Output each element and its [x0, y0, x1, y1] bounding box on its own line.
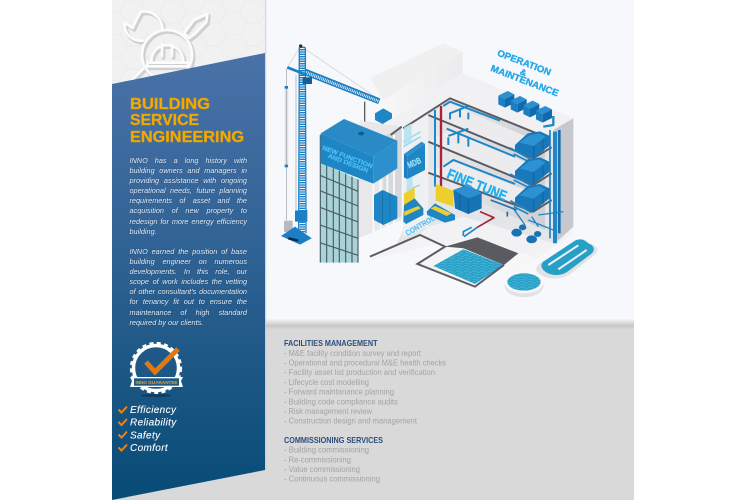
panel: hexagon header — [112, 0, 265, 90]
label: control: CONTROL — [404, 213, 437, 238]
panel: blue sidebar — [112, 53, 265, 500]
list: commissioning items: - Building commissioning — [284, 446, 369, 455]
text block: intro paragraph: requirements of asset and the — [130, 196, 247, 205]
list: facilities items: - M&E facility condition survey and report — [284, 349, 422, 358]
white wall and pillars — [358, 100, 402, 242]
label: operation and maintenance — [489, 48, 560, 98]
building penthouse — [370, 43, 463, 123]
label: operation and maintenance: & — [519, 67, 528, 78]
title: building service engineering: BUILDING — [130, 96, 210, 113]
list: benefits with check marks: Efficiency — [130, 405, 177, 416]
roof slab — [390, 73, 573, 137]
text block: intro paragraph: acquisition of new property to — [130, 206, 247, 215]
text block: intro paragraph — [129, 156, 248, 236]
list: facilities items: - Construction design and management — [284, 417, 418, 426]
label: new function and design: AND DESIGN — [327, 153, 369, 175]
list: benefits with check marks: Safety — [130, 430, 161, 441]
text block: intro paragraph: INNO has a long history with — [130, 156, 247, 165]
heading: commissioning services: COMMISSIONING SERVICES — [284, 436, 383, 445]
label: operation and maintenance: MAINTENANCE — [489, 63, 560, 98]
blue ducts and pipes — [403, 102, 563, 243]
glass facade — [320, 135, 358, 263]
background: services area — [112, 326, 634, 500]
text block: second paragraph: developments. In this role, our — [130, 267, 247, 276]
tower crane — [281, 44, 380, 245]
panel: MDB box — [404, 142, 425, 179]
list: facilities items — [284, 349, 446, 426]
blue block — [321, 119, 397, 184]
text block: second paragraph: for tenancy fit out to ensure the — [130, 297, 247, 306]
title: building service engineering — [130, 96, 244, 146]
floor slabs — [403, 98, 552, 212]
background: illustration area — [265, 0, 634, 328]
text block: second paragraph: required by our clients. — [130, 318, 203, 327]
text block: services list — [284, 339, 446, 484]
label: fine tune: FINE TUNE — [445, 165, 510, 204]
list: benefits with check marks: Comfort — [130, 443, 169, 454]
text block: intro paragraph: operational needs, future planning — [130, 186, 247, 195]
text block: second paragraph: of other consultant’s documentation — [130, 287, 247, 296]
heading: facilities management: FACILITIES MANAGEMENT — [284, 339, 378, 348]
label: operation and maintenance: OPERATION — [496, 48, 553, 78]
pool pit — [370, 235, 537, 287]
icon: guarantee badge: INNO GUARANTEE — [136, 380, 178, 385]
list: commissioning items: - Re-commissioning — [284, 455, 351, 464]
list: facilities items: - Building code compliance audits — [284, 397, 398, 406]
compressor unit — [453, 185, 482, 214]
roof chiller units — [498, 91, 552, 123]
icon: wrench, screwdriver and hard hat — [125, 11, 209, 82]
text block: second paragraph: scope of work includes the vetting — [130, 277, 247, 286]
text block: intro paragraph: redesign for more energy efficiency — [130, 217, 247, 226]
list: commissioning items: - Continuous commissioning — [284, 475, 380, 484]
illustration: building plant and systems — [370, 43, 598, 297]
text block: intro paragraph: building. — [130, 227, 157, 236]
list: facilities items: - Forward maintanance planning — [284, 388, 394, 397]
ground plate — [370, 228, 573, 272]
text block: second paragraph: building engineer on numerous — [130, 257, 247, 266]
text block: intro paragraph: building owners and managers in — [130, 166, 247, 175]
illustration: tower block and crane — [281, 44, 402, 263]
list: facilities items: - Risk management review — [284, 407, 372, 416]
panel: MDB box: MDB — [406, 155, 423, 170]
list: commissioning items: - Value commissioning — [284, 465, 360, 474]
list: commissioning items — [284, 446, 380, 484]
list: benefits with check marks — [118, 405, 177, 454]
text block: second paragraph: maintenance of high standard — [130, 308, 247, 317]
text block: second paragraph — [130, 247, 248, 327]
list: benefits with check marks: Reliability — [130, 418, 177, 429]
pumps — [511, 224, 541, 243]
text block: second paragraph: INNO earned the position of base — [130, 247, 247, 256]
title: building service engineering: ENGINEERING — [130, 129, 244, 146]
title: building service engineering: SERVICE — [130, 112, 199, 129]
list: facilities items: - Operational and procedural M&E health checks — [284, 358, 446, 368]
treatment tanks — [504, 239, 598, 297]
list: facilities items: - Facility asset list production and verification — [284, 368, 435, 377]
interior walls — [397, 98, 573, 244]
list: facilities items: - Lifecycle cost modelling — [284, 378, 369, 387]
icon: guarantee badge — [130, 343, 183, 397]
pale air shafts — [404, 123, 413, 193]
red riser pipe — [437, 106, 444, 187]
control desks — [403, 184, 455, 224]
red and blue service pipes — [463, 200, 517, 254]
floor chiller clusters — [510, 131, 550, 214]
label: new function and design: NEW FUNCTION — [321, 145, 374, 170]
wall-mounted unit — [374, 190, 397, 225]
text block: intro paragraph: providing assistance with ongoing — [130, 176, 247, 185]
